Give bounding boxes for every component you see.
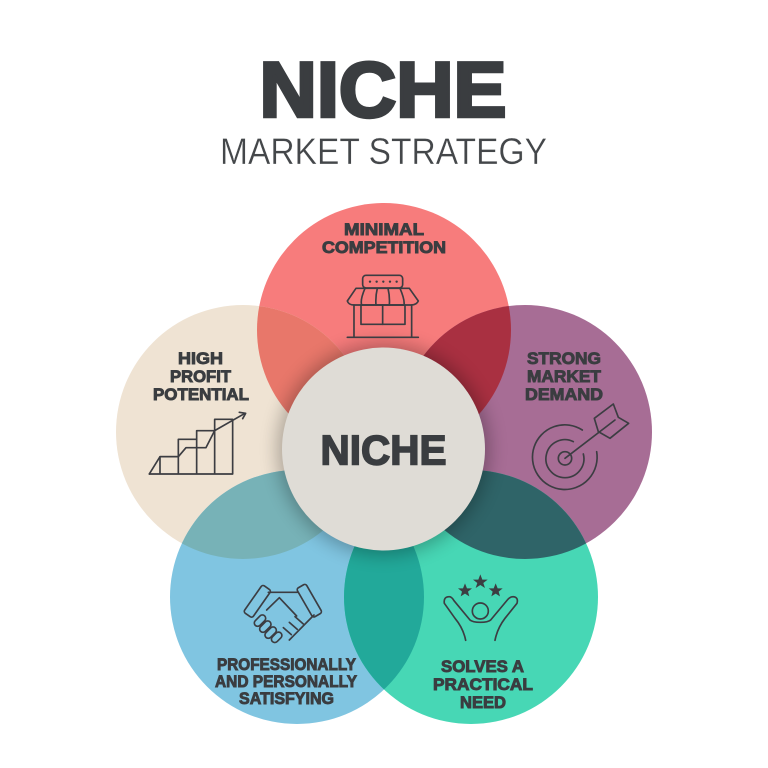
center shadow <box>278 343 490 555</box>
heading: NICHE: NICHE <box>260 46 506 134</box>
circle: professionally and personally satisfying <box>170 470 424 724</box>
icon: target with arrow <box>532 404 629 489</box>
label: professionally and personally satisfying: SATISFYING <box>239 690 334 708</box>
icon: growth chart <box>149 412 246 474</box>
center circle <box>282 348 485 550</box>
icon: person with stars <box>444 574 517 640</box>
circle: minimal competition <box>257 203 511 457</box>
circle: strong market demand <box>398 305 652 559</box>
label: high profit potential: PROFIT <box>170 368 231 386</box>
label: professionally and personally satisfying <box>215 656 357 708</box>
label: strong market demand: DEMAND <box>525 386 603 404</box>
label: solves a practical need: SOLVES A <box>441 658 524 676</box>
label: minimal competition <box>322 221 446 257</box>
title <box>220 46 547 172</box>
label: strong market demand: STRONG <box>527 350 601 368</box>
label: high profit potential: POTENTIAL <box>153 386 249 404</box>
label: solves a practical need: PRACTICAL <box>433 676 533 694</box>
label: professionally and personally satisfying: AND PERSONALLY <box>215 673 357 691</box>
label: strong market demand <box>525 350 603 404</box>
label: minimal competition: COMPETITION <box>322 239 446 257</box>
icon: handshake <box>243 584 322 644</box>
icon: storefront <box>347 275 418 337</box>
label: solves a practical need <box>433 658 533 712</box>
label: professionally and personally satisfying: PROFESSIONALLY <box>217 656 356 674</box>
subheading: market strategy: MARKET STRATEGY <box>220 131 547 172</box>
overlap: blue and green <box>344 546 424 690</box>
label: strong market demand: MARKET <box>527 368 601 386</box>
label: minimal competition: MINIMAL <box>344 221 424 239</box>
overlap: red and beige <box>257 306 344 414</box>
circle: high profit potential <box>116 305 370 559</box>
label: high profit potential <box>153 350 249 404</box>
overlap: purple and green <box>444 470 586 559</box>
circle: solves a practical need <box>344 470 598 724</box>
label: solves a practical need: NEED <box>460 694 506 712</box>
overlap: beige and blue <box>182 470 323 559</box>
center label: NICHE <box>320 426 446 474</box>
overlap: red and purple <box>424 306 511 414</box>
label: high profit potential: HIGH <box>178 350 223 368</box>
venn diagram <box>116 203 652 724</box>
